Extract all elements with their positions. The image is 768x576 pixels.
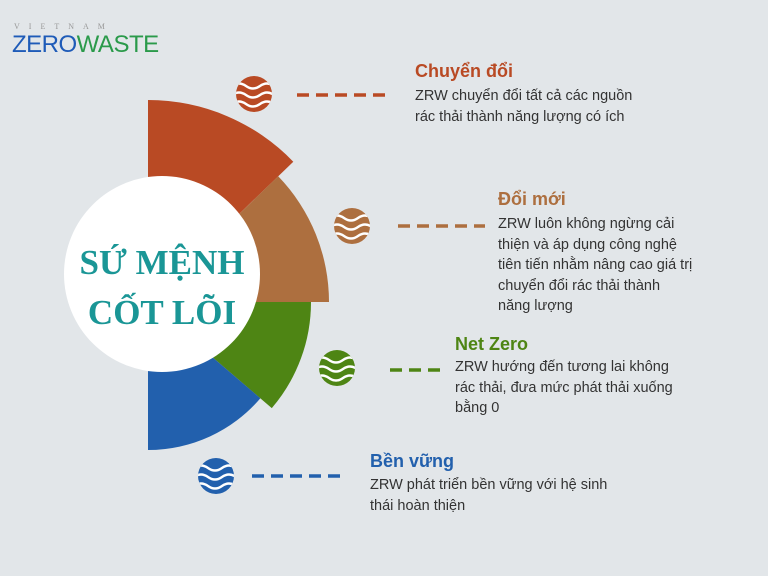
heading: Đổi mới: Đổi mới	[498, 189, 566, 209]
text: Đổi mới: thiện và áp dụng công nghệ	[498, 236, 677, 252]
text: Đổi mới	[498, 216, 692, 314]
icon: green	[319, 350, 355, 386]
text: Đổi mới: ZRW luôn không ngừng cải	[498, 216, 674, 232]
fan chart	[64, 76, 485, 494]
sector: brown	[148, 176, 329, 302]
text: Bền vững	[370, 477, 607, 514]
center circle title: SỨ MỆNH	[80, 242, 244, 282]
sector: green	[148, 302, 311, 408]
text: Chuyển đổi: ZRW chuyển đổi tất cả các nguồn	[415, 88, 632, 104]
center circle title	[64, 176, 260, 372]
heading: Bền vững: Bền vững	[370, 451, 454, 471]
text: Bền vững: ZRW phát triển bền vững với hệ sinh	[370, 477, 607, 493]
text: Chuyển đổi: rác thải thành năng lượng có ích	[415, 108, 624, 124]
text: Bền vững: thái hoàn thiện	[370, 498, 465, 514]
heading: Chuyển đổi: Chuyển đổi	[415, 61, 513, 81]
text: Chuyển đổi	[415, 88, 632, 124]
text: Đổi mới: tiên tiến nhằm nâng cao giá trị	[498, 257, 692, 273]
logo: VIETNAM	[14, 22, 114, 31]
text: Net Zero: bằng 0	[455, 400, 499, 416]
dashes	[252, 95, 485, 476]
text: Net Zero: ZRW hướng đến tương lai không	[455, 359, 669, 375]
text: Đổi mới: chuyển đổi rác thải thành	[498, 278, 660, 294]
sector: blue	[148, 302, 260, 450]
icon: red	[236, 76, 272, 112]
heading: Net Zero: Net Zero	[455, 334, 528, 354]
text: Đổi mới: năng lượng	[498, 298, 573, 314]
sector: red	[148, 100, 293, 302]
logo: ZEROWASTE	[12, 31, 159, 58]
icon: blue	[198, 458, 234, 494]
text: Net Zero: rác thải, đưa mức phát thải xuống	[455, 380, 673, 396]
center circle title: CỐT LÕI	[88, 291, 236, 332]
icon: brown	[334, 208, 370, 244]
text: Net Zero	[455, 359, 673, 416]
